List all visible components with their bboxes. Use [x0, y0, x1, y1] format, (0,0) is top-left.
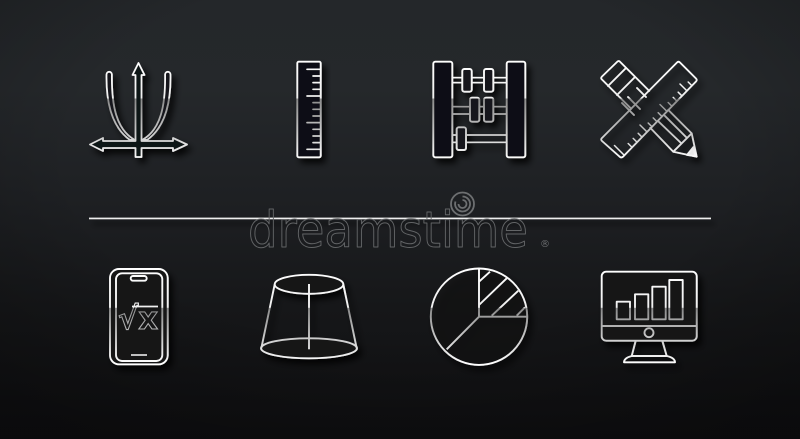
square root symbol: √x: [118, 301, 158, 337]
watermark spiral: [451, 192, 474, 216]
icon: truncated cone: [261, 275, 357, 358]
pencil: [601, 61, 697, 157]
icon: pie chart: [431, 268, 527, 365]
icon: parabola graph with axes: [90, 63, 187, 157]
watermark: dreamstime: ®: [540, 239, 550, 250]
watermark: dreamstime: dreamstime: [248, 201, 528, 259]
icon: ruler: [297, 62, 321, 157]
divider line: [89, 218, 711, 219]
icon: monitor with bar chart: [602, 272, 697, 362]
icon: crossed pencil and ruler: [601, 61, 697, 157]
ruler: [601, 62, 697, 157]
icon: abacus: [433, 62, 525, 157]
icon: phone with square root: [110, 269, 168, 364]
